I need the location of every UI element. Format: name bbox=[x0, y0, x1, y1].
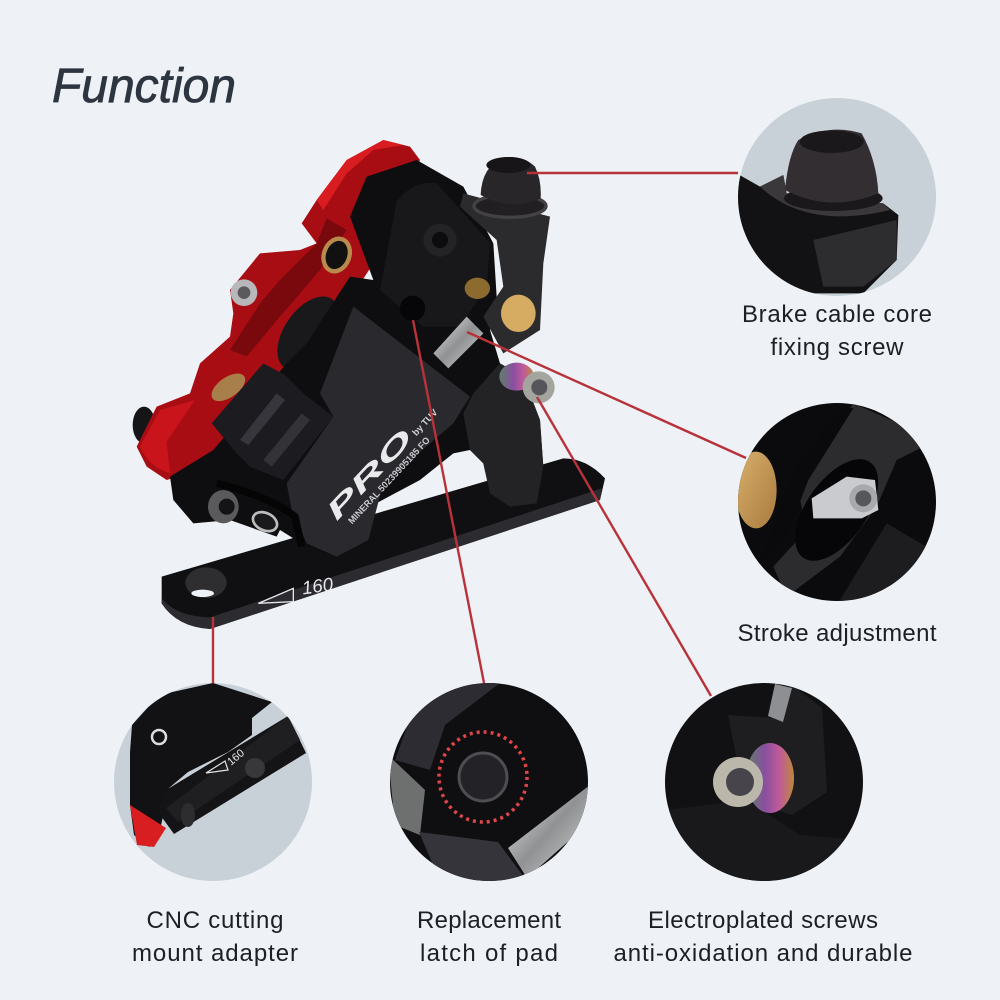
caption: mount adapter bbox=[132, 940, 298, 967]
latch screw bbox=[459, 753, 507, 801]
caption bbox=[417, 907, 561, 967]
lower screws bbox=[208, 490, 239, 523]
detail: mount adapter bbox=[114, 683, 312, 967]
detail: brake cable core fixing screw bbox=[737, 98, 936, 361]
detail: replacement latch bbox=[388, 683, 590, 967]
detail: electroplated screws bbox=[614, 683, 912, 967]
brand marking bbox=[321, 398, 450, 532]
pad latch clip bbox=[212, 363, 333, 480]
caption: Brake cable core bbox=[742, 301, 932, 328]
product: disc brake caliper bbox=[133, 140, 605, 629]
caption: Stroke adjustment bbox=[738, 620, 937, 647]
red body bolt bbox=[231, 279, 257, 306]
mount adapter bbox=[162, 458, 605, 629]
caption bbox=[132, 907, 298, 967]
brand marking: MINERAL 50239905185 FO bbox=[346, 435, 432, 526]
caption: latch of pad bbox=[420, 940, 558, 967]
lower brass washer bbox=[207, 368, 250, 407]
caption bbox=[614, 907, 912, 967]
caption: anti-oxidation and durable bbox=[614, 940, 912, 967]
caption bbox=[742, 301, 932, 361]
black body bbox=[170, 160, 543, 557]
detail: stroke adjustment bbox=[735, 403, 943, 647]
left piston tip bbox=[133, 407, 155, 443]
adapter marking detail: 160 bbox=[225, 747, 247, 768]
body screws bbox=[423, 223, 457, 257]
leader lines bbox=[213, 173, 746, 696]
cable fixing head bbox=[474, 195, 546, 217]
brand marking: by TUV bbox=[410, 407, 440, 438]
caption: Replacement bbox=[417, 907, 561, 934]
upper brass washer bbox=[319, 235, 354, 275]
electroplated bolt bbox=[499, 363, 534, 391]
adapter marking: 160 bbox=[301, 573, 335, 598]
brand marking: PRO bbox=[321, 424, 418, 526]
right arm bbox=[460, 193, 550, 353]
caption: fixing screw bbox=[770, 334, 904, 361]
adjuster pin bbox=[433, 317, 483, 368]
caption: Electroplated screws bbox=[648, 907, 878, 934]
copper pad bbox=[285, 285, 350, 372]
title: Function bbox=[52, 60, 236, 113]
brass adjuster bbox=[501, 295, 536, 332]
rotor recess bbox=[265, 285, 352, 381]
red caliper body bbox=[137, 140, 420, 480]
caption: CNC cutting bbox=[146, 907, 284, 934]
